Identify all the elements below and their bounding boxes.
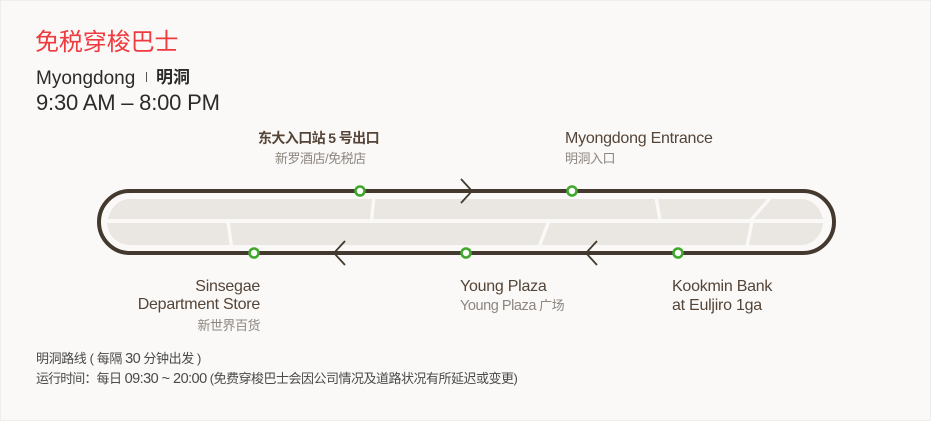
route line [99, 191, 834, 253]
city blocks [100, 197, 830, 247]
label: Dongdaemun stop: 东大入口站 5 号出口 [258, 130, 379, 146]
note: operating time: 运行时间：每日 09:30 ~ 20:00 (免费穿梭巴士会因公司情况及道路状况有所延迟或变更) [36, 371, 517, 387]
label: Young Plaza: Young Plaza [460, 278, 547, 295]
note: route frequency: 明洞路线 ( 每隔 30 分钟出发 ) [36, 351, 201, 367]
route name [36, 68, 190, 89]
route name: Myongdong [36, 68, 135, 89]
label: Kookmin Bank: at Euljiro 1ga [672, 297, 762, 314]
label: Sinsegae [138, 278, 260, 313]
operating hours: 9:30 AM – 8:00 PM [36, 90, 220, 115]
label: Sinsegae: Department Store [138, 296, 260, 313]
label: Kookmin Bank: Kookmin Bank [672, 278, 772, 295]
label: Myongdong Entrance: Myongdong Entrance [565, 130, 713, 147]
arrow: eastbound [461, 179, 472, 203]
arrow: westbound 2 [586, 241, 597, 265]
title: 免税穿梭巴士 [35, 29, 178, 56]
sublabel: Sinsegae: 新世界百货 [197, 318, 260, 333]
route name: 明洞 [156, 68, 190, 87]
arrow: westbound 1 [334, 241, 345, 265]
sublabel: Myongdong Entrance: 明洞入口 [565, 151, 615, 166]
label: Kookmin Bank [672, 278, 772, 314]
sublabel: Young Plaza: Young Plaza 广场 [460, 298, 564, 314]
sublabel: Shilla: 新罗酒店/免税店 [275, 151, 366, 166]
stops [250, 186, 682, 258]
label: Sinsegae: Sinsegae [195, 278, 260, 295]
